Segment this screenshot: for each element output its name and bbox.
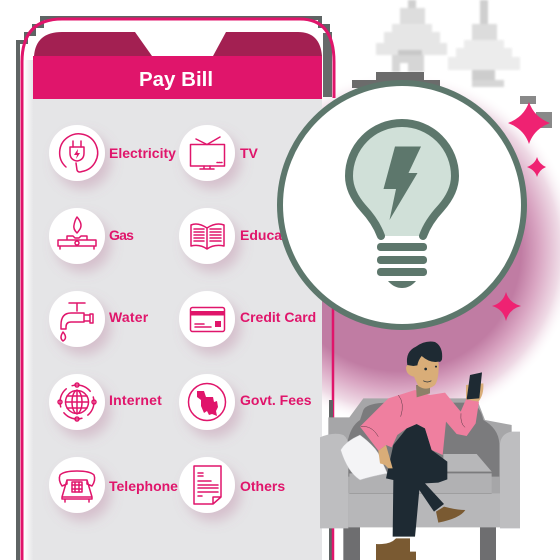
person on sofa — [320, 342, 520, 560]
menu: govt fees — [179, 374, 312, 430]
menu: water — [49, 291, 149, 347]
sparkles — [492, 96, 552, 321]
bulb icon — [349, 123, 455, 288]
sweater — [360, 390, 479, 455]
pillow — [341, 435, 387, 480]
hanging lamps — [376, 0, 520, 87]
hand with phone — [378, 445, 393, 468]
phone top notch bars — [34, 32, 322, 56]
header bar: Pay Bill — [139, 68, 213, 91]
big circle with light bulb — [280, 72, 524, 327]
legs — [386, 424, 447, 537]
header bar — [33, 56, 322, 99]
menu: internet — [49, 374, 162, 430]
menu: others — [179, 457, 285, 513]
menu: govt fees: Govt. Fees — [240, 392, 312, 408]
menu: education: Education — [240, 227, 308, 243]
phone frame — [18, 18, 334, 560]
menu: telephone — [49, 457, 178, 513]
menu: gas — [49, 208, 134, 264]
phone screen panel — [33, 99, 322, 560]
menu: internet: Internet — [109, 392, 162, 408]
menu: telephone: Telephone — [109, 478, 178, 494]
menu: others: Others — [240, 478, 285, 494]
sofa — [320, 398, 520, 560]
menu: credit card — [179, 291, 316, 347]
menu: water: Water — [109, 309, 149, 325]
menu: education — [179, 208, 308, 264]
head — [416, 385, 430, 397]
menu: gas: Gas — [109, 227, 134, 243]
menu: electricity — [49, 125, 176, 181]
menu: electricity: Electricity — [109, 145, 176, 161]
menu: credit card: Credit Card — [240, 309, 316, 325]
menu: TV: TV — [240, 145, 259, 161]
shoes — [436, 507, 465, 523]
menu: TV — [179, 125, 259, 181]
background glow — [322, 86, 560, 412]
